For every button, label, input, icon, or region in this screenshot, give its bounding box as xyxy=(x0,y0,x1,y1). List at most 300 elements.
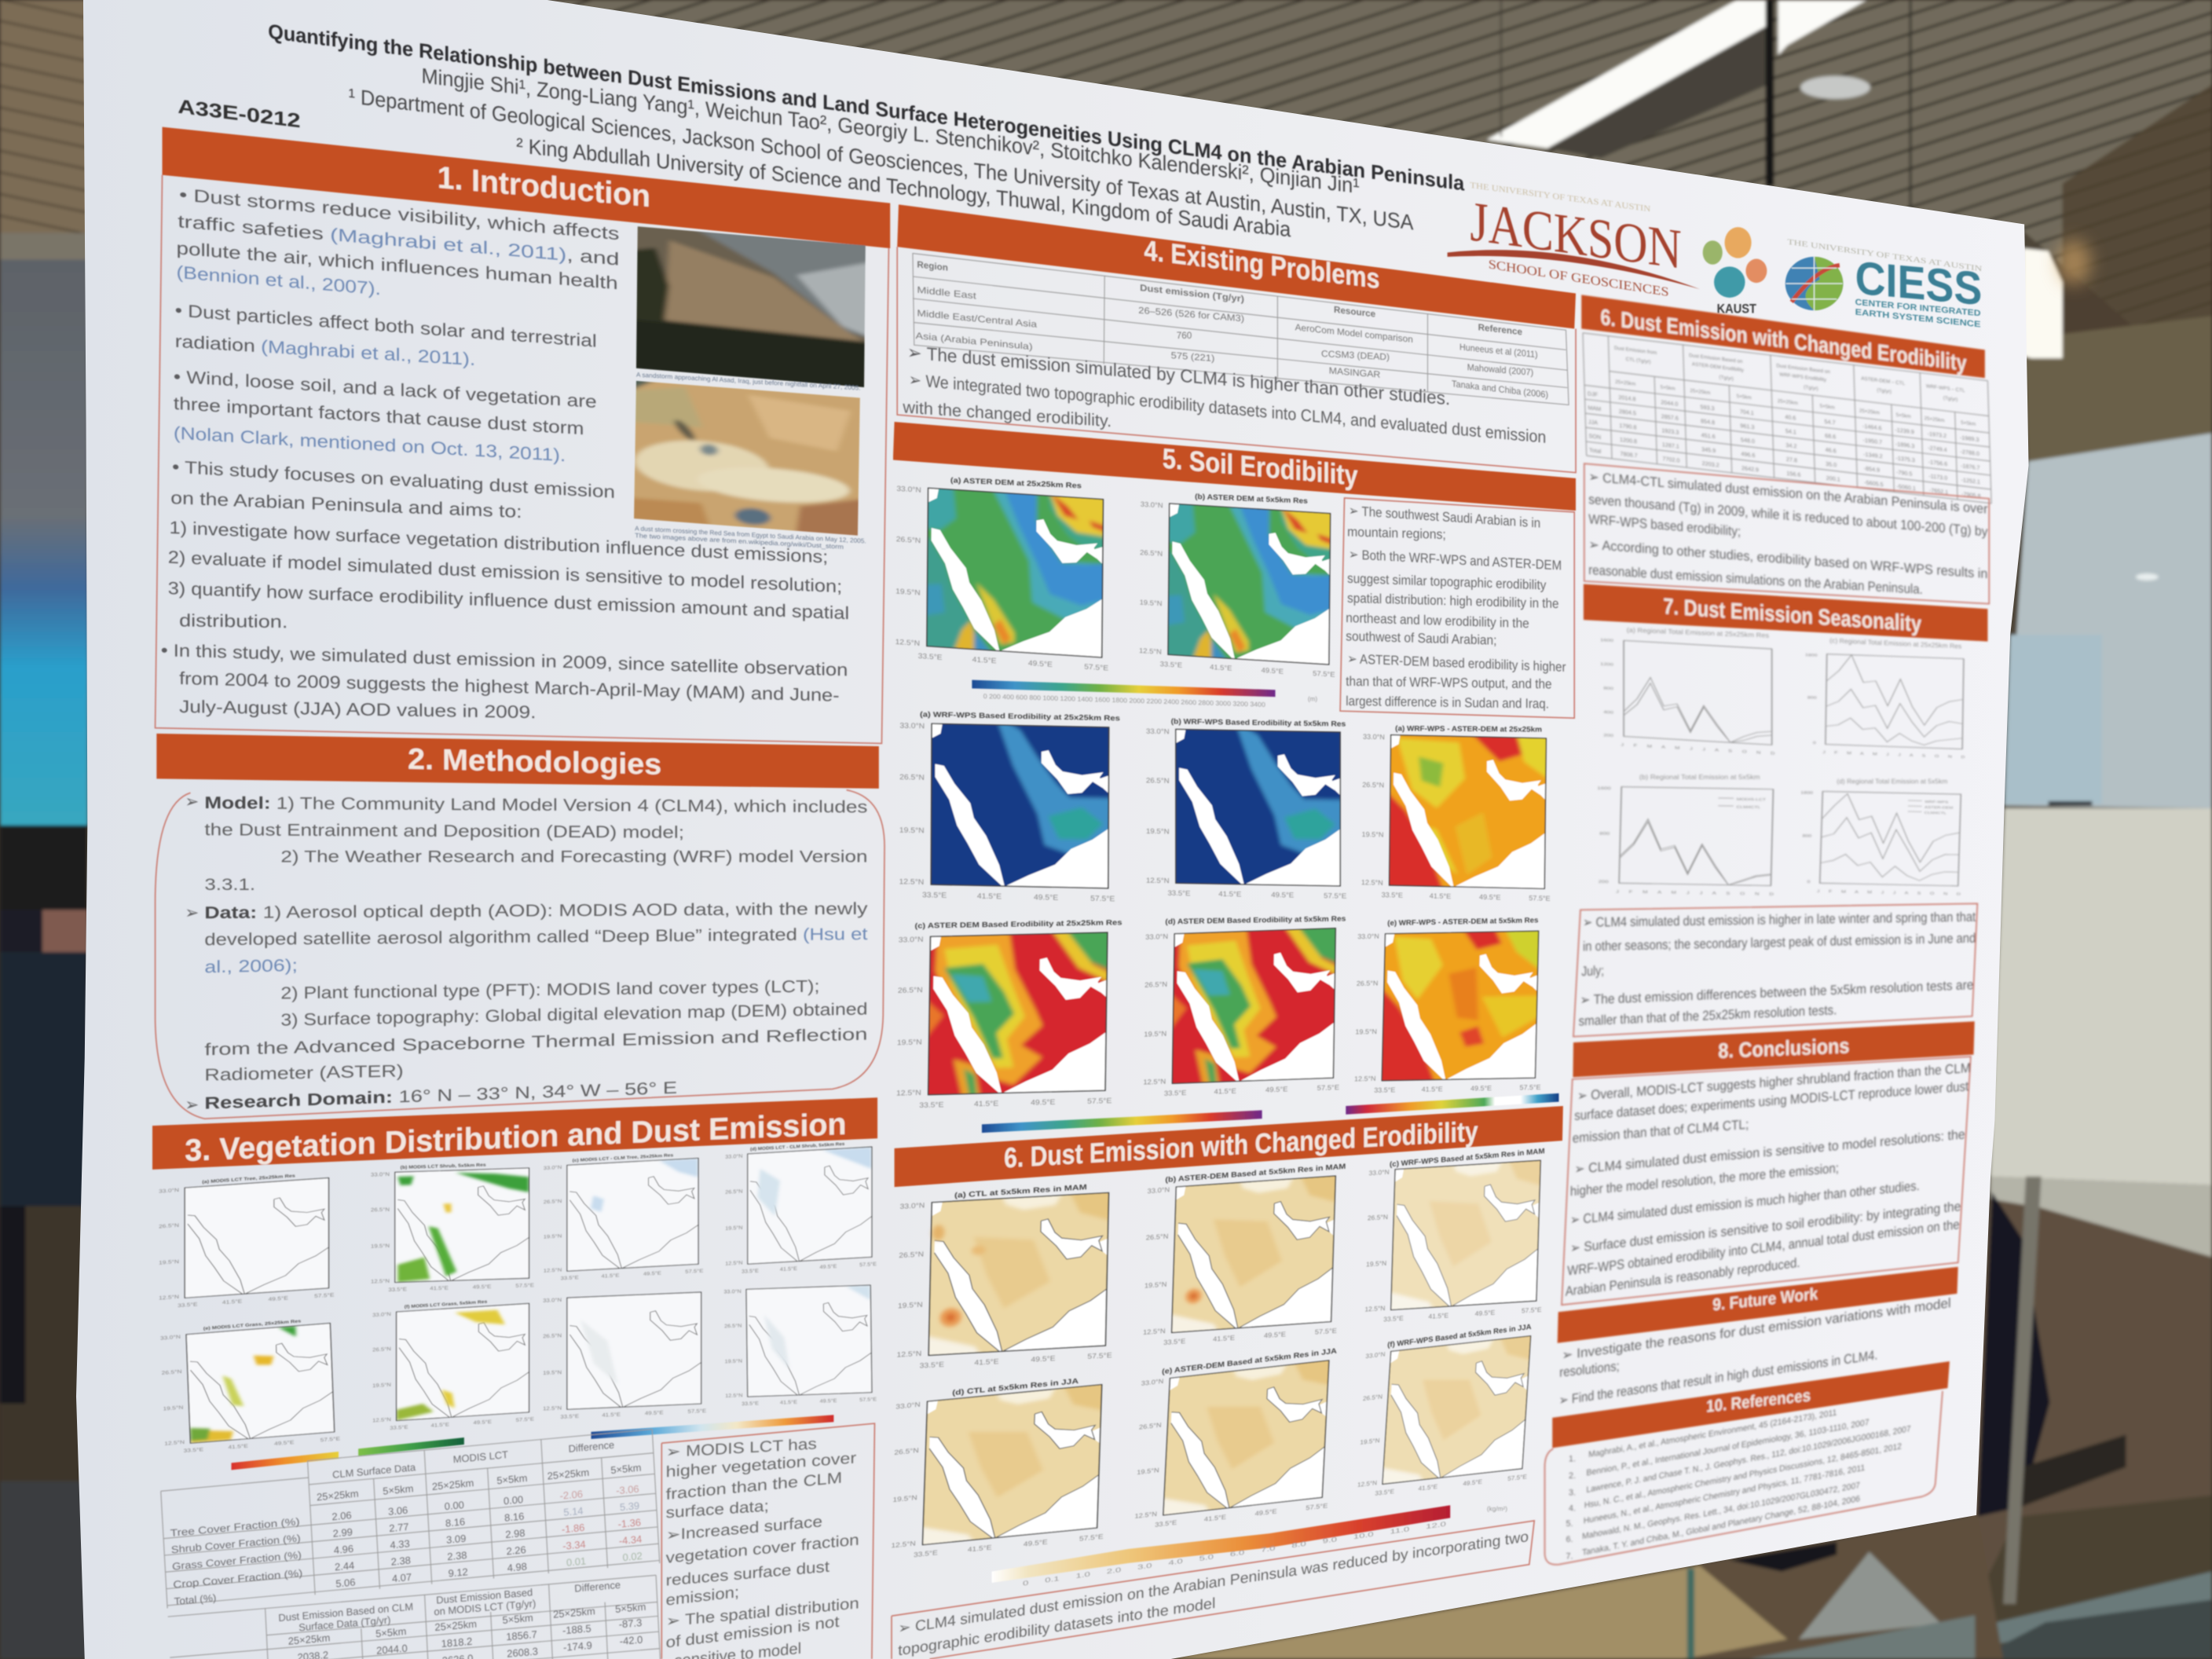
table: dust emission by vegetation: 2044.0 xyxy=(376,1643,408,1657)
table: published dust emission estimates: MASINGAR xyxy=(1329,366,1380,380)
map: WRF minus ASTER 5 km xyxy=(1354,916,1548,1094)
chart: regional emission b: 200 xyxy=(1599,880,1609,884)
introduction text: • Dust storms reduce visibility, which affects xyxy=(179,185,619,244)
panel: 3. Vegetation Distribution and Dust Emission xyxy=(152,1097,877,1659)
logo: Jackson School of Geosciences: JACKSON xyxy=(1470,190,1682,281)
table: vegetation cover fractions: 5×5km xyxy=(383,1482,414,1497)
table: vegetation cover fractions: -2.06 xyxy=(559,1488,583,1502)
table: published dust emission estimates: Middle East/Central Asia xyxy=(917,308,1038,330)
table: seasonal dust emission: Dust Emission Based on xyxy=(1689,353,1743,364)
introduction text: July-August (JJA) AOD values in 2009. xyxy=(179,697,536,722)
table: seasonal dust emission: 5×5km xyxy=(1661,385,1675,392)
chart: regional emission b: 1600 xyxy=(1597,786,1611,791)
table: seasonal dust emission: -790.5 xyxy=(1896,468,1913,478)
table: seasonal dust emission: 1287.1 xyxy=(1662,441,1679,450)
colorbar: erodibility xyxy=(982,1110,1262,1133)
chart: regional emission d: WRF-WPS xyxy=(1925,800,1949,804)
map: difference 1: (c) MODIS LCT - CLM Tree, 25x25km Res xyxy=(573,1154,674,1163)
table: vegetation cover fractions: 2.98 xyxy=(505,1527,526,1540)
map: WRF-WPS MAM: (c) WRF-WPS Based at 5x5km Res in MAM xyxy=(1390,1147,1545,1168)
vegetation findings text box: surface data; xyxy=(666,1498,769,1522)
table: vegetation cover fractions: 2.06 xyxy=(331,1509,352,1522)
table: vegetation cover fractions: Shrub Cover Fraction (%) xyxy=(171,1532,301,1555)
chart: regional emission a: J F M A M J J A S O N D xyxy=(1621,743,1775,756)
introduction text: traffic safeties (Maghrabi et al., 2011) , and xyxy=(178,211,619,269)
table: seasonal dust emission: 25×25km xyxy=(1924,416,1945,423)
introduction text: distribution. xyxy=(179,610,287,632)
conclusions text: higher the model resolution, the more the emission; xyxy=(1570,1160,1839,1199)
introduction text: • This study focuses on evaluating dust emission xyxy=(172,457,615,502)
title: Quantifying the Relationship between Dust Emissions and Land Surface Heterogeneities Using CLM4 on the Arabian Peninsula xyxy=(268,20,1465,196)
introduction text: three important factors that cause dust storm xyxy=(174,394,584,438)
table: seasonal dust emission: 200.1 xyxy=(1826,474,1840,483)
chart: regional emission a: 400 xyxy=(1603,710,1613,715)
map: WRF-WPS JJA xyxy=(1357,1323,1540,1499)
table: seasonal dust emission: 7808.7 xyxy=(1620,450,1638,459)
banner: 3. Vegetation: 3. Vegetation Distribution and Dust Emission xyxy=(185,1107,847,1168)
map: ASTER erodibility 5 km xyxy=(1143,914,1346,1098)
chart: regional emission a: 200 xyxy=(1603,733,1613,738)
table: seasonal dust emission: -1950.7 xyxy=(1863,437,1882,445)
soil erodibility text box: largest difference is in Sudan and Iraq. xyxy=(1346,694,1549,712)
table: dust emission by vegetation: -188.5 xyxy=(562,1622,591,1636)
table: seasonal dust emission: 2203.2 xyxy=(1702,460,1719,469)
logo: CIESS: THE UNIVERSITY OF TEXAS AT AUSTIN xyxy=(1787,238,1982,273)
table: seasonal dust emission: -1876.7 xyxy=(1961,462,1980,471)
table: seasonal dust emission: 2044.0 xyxy=(1661,398,1678,408)
table: published dust emission estimates: Huneeus et al (2011) xyxy=(1459,342,1538,360)
table: seasonal dust emission: JJA xyxy=(1588,418,1598,427)
map: ASTER erodibility 5 km: (d) ASTER DEM Based Erodibility at 5x5km Res xyxy=(1165,914,1346,925)
map: difference 2: (d) MODIS LCT - CLM Shrub, 5x5km Res xyxy=(750,1142,845,1152)
banner: 4. Existing Problems: 4. Existing Problems xyxy=(1144,234,1379,295)
table: vegetation cover fractions: 2.38 xyxy=(447,1549,467,1562)
table: seasonal dust emission: -1349.2 xyxy=(1863,451,1883,460)
table: dust emission by vegetation: -174.9 xyxy=(563,1639,592,1654)
table: seasonal dust emission: 5×5km xyxy=(1961,420,1976,427)
chart: regional emission a xyxy=(1600,627,1775,756)
banner: 2. Methodologies xyxy=(156,734,879,789)
table: seasonal dust emission: 1923.3 xyxy=(1661,427,1679,436)
reference list: Hsu, N. C., et al., Atmospheric Chemistry and Physics Discussions, 12, 8465-8501, 2012 xyxy=(1584,1441,1902,1511)
table: seasonal dust emission: -1756.6 xyxy=(1928,458,1947,467)
table: dust emission by vegetation: Dust Emission Based on CLM xyxy=(278,1601,413,1624)
colorbar: dust emission xyxy=(992,1505,1507,1588)
table: seasonal dust emission: -1239.9 xyxy=(1895,427,1914,435)
map: CTL MAM: (a) CTL at 5x5km Res in MAM xyxy=(954,1183,1087,1199)
map: difference 3 xyxy=(543,1291,706,1421)
table: seasonal dust emission: 451.6 xyxy=(1701,431,1716,440)
table: dust emission by vegetation: -87.3 xyxy=(618,1617,643,1630)
table: dust emission by vegetation: 25×25km xyxy=(553,1605,595,1621)
authors: Mingjie Shi¹, Zong-Liang Yang¹, Weichun Tao², Georgiy L. Stenchikov², Stoitchko Kalenderski², Qinjian Jin¹ xyxy=(421,64,1360,198)
map: difference 1 xyxy=(544,1152,704,1282)
introduction text: 3) quantify how surface erodibility influence dust emission amount and spatial xyxy=(168,578,849,623)
table: seasonal dust emission: 2857.6 xyxy=(1661,412,1679,422)
chart: regional emission b xyxy=(1595,774,1777,896)
table: vegetation cover fractions: CLM Surface Data xyxy=(332,1461,416,1481)
table: seasonal dust emission: -854.9 xyxy=(1864,465,1880,474)
table: seasonal dust emission: 5×5km xyxy=(1737,394,1752,401)
table: seasonal dust emission: ASTER-DEM – CTL xyxy=(1861,376,1906,386)
table: vegetation cover fractions: 5.06 xyxy=(335,1576,356,1590)
panel: 10. References xyxy=(1545,1361,1950,1565)
banner: 6. Dust Emission table xyxy=(1581,295,1985,378)
table: seasonal dust emission: 704.1 xyxy=(1740,408,1754,416)
table: seasonal dust emission: (Tg/yr) xyxy=(1943,395,1957,403)
reference list: 5. xyxy=(1566,1519,1573,1529)
table: seasonal dust emission: 40.6 xyxy=(1785,413,1796,422)
vegetation findings text box: ➢ MODIS LCT has xyxy=(666,1435,817,1461)
erodibility results text box: reasonable dust emission simulations on the Arabian Peninsula. xyxy=(1588,562,1923,597)
affiliation 2: ² King Abdullah University of Science and Technology, Thuwal, Kingdom of Saudi Arabia xyxy=(516,134,1291,242)
conclusions text: WRF-WPS obtained erodibility into CLM4, annual total dust emission on the xyxy=(1567,1217,1960,1278)
soil erodibility text box xyxy=(1340,498,1574,718)
table: seasonal dust emission: 1200.8 xyxy=(1620,436,1637,445)
chart: regional emission d: 1800 xyxy=(1800,791,1814,795)
table: vegetation cover fractions: 9.12 xyxy=(448,1566,468,1580)
table: dust emission by vegetation: 1818.2 xyxy=(441,1635,473,1650)
vegetation findings text box: ➢Increased surface xyxy=(666,1513,822,1544)
table: published dust emission estimates: AeroCom Model comparison xyxy=(1295,322,1413,345)
affiliation 1: ¹ Department of Geological Sciences, Jackson School of Geosciences, The University of Texas at Austin, Austin, TX, USA xyxy=(349,84,1414,234)
poster id: A33E-0212 xyxy=(178,96,301,132)
vegetation findings text box xyxy=(661,1423,874,1659)
table: dust emission by vegetation: Difference xyxy=(574,1579,621,1595)
colorbar: dust emission: 0 0.1 1.0 2.0 3.0 4.0 5.0 6.0 7.0 8.0 9.0 10.0 11.0 12.0 xyxy=(1023,1520,1446,1588)
map: ASTER DEM 5 km: (b) ASTER DEM at 5x5km Res xyxy=(1195,493,1308,505)
reference list: 4. xyxy=(1569,1503,1576,1513)
photo caption: A sandstorm approaching Al Asad, Iraq, just before nightfall on April 27, 2005. xyxy=(636,372,861,392)
table: published dust emission estimates: Asia (Arabia Peninsula) xyxy=(916,331,1033,352)
table: seasonal dust emission: -1989.3 xyxy=(1960,434,1979,443)
table: vegetation cover fractions: 0.02 xyxy=(622,1550,643,1563)
reference list: Lawrence, P. J. and Chase T. N., J. Geophys. Res., 112, doi:10.1029/2006JG000168, 2007 xyxy=(1587,1424,1911,1495)
chart: regional emission b: (b) Regional Total Emission at 5x5km xyxy=(1639,774,1760,781)
table: dust emission by vegetation: Surface Data (Tg/yr) xyxy=(298,1613,391,1633)
lamp glow xyxy=(2056,240,2091,285)
seasonality text box: smaller than that of the 25x25km resolution tests. xyxy=(1579,1002,1837,1029)
table: seasonal dust emission: (Tg/yr) xyxy=(1804,385,1818,392)
methodology text: Data: 1) Aerosol optical depth (AOD): MODIS AOD data, with the newly xyxy=(204,899,868,922)
colorbar: dust emission: (kg/m²) xyxy=(1487,1505,1507,1512)
erodibility results text box: WRF-WPS based erodibility; xyxy=(1588,511,1741,539)
table: seasonal dust emission: -5060.1 xyxy=(1896,482,1916,492)
table: vegetation cover fractions: 5×5km xyxy=(496,1472,528,1486)
table: seasonal dust emission: 25×25km xyxy=(1690,388,1711,396)
table: seasonal dust emission: 27.8 xyxy=(1786,456,1797,463)
banner: 5. Soil Erodibility: 5. Soil Erodibility xyxy=(1163,442,1358,492)
erodibility results text box: seven thousand (Tg) in 2009, while it is reduced to about 100-200 (Tg) by xyxy=(1588,492,1988,539)
logo: CIESS: CENTER FOR INTEGRATED xyxy=(1855,298,1981,318)
table: seasonal dust emission: -7652.1 xyxy=(1929,486,1948,496)
chart: regional emission d: J F M A M J J A S O N D xyxy=(1817,890,1961,896)
logo: CIESS: EARTH SYSTEM SCIENCE xyxy=(1855,308,1980,329)
seasonality text box: in other seasons; the secondary largest peak of dust emission is in June and xyxy=(1583,931,1976,954)
table: seasonal dust emission: 548.0 xyxy=(1741,436,1755,445)
existing problems text: ➢ The dust emission simulated by CLM4 is higher than other studies. xyxy=(907,342,1450,408)
table: vegetation cover fractions: Crop Cover Fraction (%) xyxy=(173,1567,303,1591)
table: dust emission by vegetation: 5×5km xyxy=(615,1601,646,1615)
map: difference 4 xyxy=(723,1284,877,1408)
photo: sandstorm wall xyxy=(635,225,866,388)
soil erodibility text box: ➢ Both the WRF-WPS and ASTER-DEM xyxy=(1349,547,1562,573)
map: grass fraction with yellow patches xyxy=(160,1317,340,1456)
soil erodibility text box: mountain regions; xyxy=(1347,524,1446,542)
map: WRF-WPS erodibility 5 km xyxy=(1146,717,1350,900)
poster header: title and authors xyxy=(178,20,1465,242)
table: published dust emission estimates: 26–526 (526 for CAM3) xyxy=(1138,306,1244,324)
table: seasonal dust emission: Dust Emission Based on xyxy=(1776,363,1830,375)
map: tree fraction CLM: (a) MODIS LCT Tree, 25x25km Res xyxy=(202,1174,295,1185)
map: ASTER-DEM JJA xyxy=(1134,1346,1339,1531)
table: vegetation cover fractions: Total (%) xyxy=(174,1591,217,1607)
map: grass fraction 5 km: (f) MODIS LCT Grass, 5x5km Res xyxy=(405,1299,488,1309)
map: grass fraction 5 km xyxy=(372,1296,534,1432)
table: seasonal dust emission: -5605.5 xyxy=(1864,478,1884,488)
panel: 6. Dust Emission with Changed Erodibility (table) xyxy=(1581,295,1991,604)
table: vegetation cover fractions: 25×25km xyxy=(317,1488,359,1503)
introduction text: • In this study, we simulated dust emission in 2009, since satellite observation xyxy=(161,640,848,679)
chart: regional emission d xyxy=(1797,778,1965,896)
reference list: 6. xyxy=(1566,1535,1573,1544)
table: seasonal dust emission: 1790.8 xyxy=(1619,422,1637,430)
table: seasonal dust emission: -1173.0 xyxy=(1928,472,1947,482)
chart: regional emission b: J F M A M J J A S O N D xyxy=(1616,890,1774,896)
table: vegetation cover fractions: 0.01 xyxy=(566,1555,586,1569)
table: vegetation cover fractions: 4.98 xyxy=(507,1560,527,1574)
chart: regional emission d: (d) Regional Total Emission at 5x5km xyxy=(1837,778,1948,786)
table: seasonal dust emission: 7702.0 xyxy=(1662,455,1680,464)
erodibility results text box xyxy=(1584,463,1989,604)
map: tree fraction MODIS with green patches: (b) MODIS LCT Shrub, 5x5km Res xyxy=(401,1163,486,1170)
reference list: 3. xyxy=(1569,1489,1576,1498)
table: seasonal dust emission: Dust Emission from xyxy=(1614,346,1657,356)
banner: 8. Conclusions xyxy=(1573,1021,1975,1077)
chart: regional emission d: 800 xyxy=(1802,834,1812,838)
table: published dust emission estimates: Reference xyxy=(1478,322,1522,337)
table: vegetation cover fractions: 0.00 xyxy=(504,1493,523,1507)
table: seasonal dust emission: 54.1 xyxy=(1785,427,1796,436)
future work text: ➢ Investigate the reasons for dust emission variations with model xyxy=(1562,1295,1951,1363)
panel: 2. Methodologies xyxy=(156,734,884,1119)
photo caption: A dust storm crossing the Red Sea from Egypt to Saudi Arabia on May 12, 2005. xyxy=(635,525,866,544)
table: seasonal dust emission: 2804.5 xyxy=(1619,408,1636,416)
chart: regional emission b: MODIS-LCT xyxy=(1737,798,1767,802)
methodology text: Radiometer (ASTER) xyxy=(204,1060,404,1085)
table: vegetation cover fractions: Grass Cover Fraction (%) xyxy=(172,1549,302,1573)
soil erodibility text box: suggest similar topographic erodibility xyxy=(1347,571,1547,593)
future work text xyxy=(1558,1295,1951,1408)
banner: 2. Methodologies: 2. Methodologies xyxy=(408,742,661,781)
table: published dust emission estimates: Tanaka and Chiba (2006) xyxy=(1452,379,1548,400)
existing problems text: with the changed erodibility. xyxy=(902,397,1111,430)
map: grass fraction with yellow patches: (e) MODIS LCT Grass, 25x25km Res xyxy=(203,1319,302,1331)
logo: CIESS: CIESS xyxy=(1855,251,1982,315)
table: seasonal dust emission: 68.6 xyxy=(1825,432,1836,440)
banner: 10. References: 10. References xyxy=(1706,1385,1811,1416)
conclusions text xyxy=(1566,1060,1971,1299)
reference list: 7. xyxy=(1566,1551,1573,1561)
introduction text: (Bennion et al., 2007). xyxy=(176,262,381,298)
map: WRF minus ASTER 5 km: (e) WRF-WPS - ASTER-DEM at 5x5km Res xyxy=(1387,916,1538,927)
banner: 9. Future Work: 9. Future Work xyxy=(1712,1284,1818,1314)
table: published dust emission estimates: 575 (221) xyxy=(1171,350,1214,364)
logo: CIESS xyxy=(1785,238,1982,329)
map: ASTER-DEM JJA: (e) ASTER-DEM Based at 5x5km Res in JJA xyxy=(1162,1346,1337,1375)
table: published dust emission estimates: Mahowald (2007) xyxy=(1467,362,1533,378)
table: seasonal dust emission: (Tg/yr) xyxy=(1877,387,1892,395)
table: seasonal dust emission: WRF-WPS – CTL xyxy=(1926,383,1965,394)
table: seasonal dust emission: -1973.2 xyxy=(1928,430,1946,439)
panel: 5. Soil Erodibility xyxy=(893,422,1576,1133)
map: WRF-WPS erodibility 25 km xyxy=(899,710,1120,903)
table: published dust emission estimates: Middle East xyxy=(917,285,977,302)
banner: 6. Dust Emission maps xyxy=(895,1106,1563,1187)
soil erodibility text box: southwest of Saudi Arabian; xyxy=(1346,628,1496,648)
table: vegetation cover fractions: -3.34 xyxy=(562,1538,586,1552)
conclusions text: ➢ CLM4 simulated dust emission is sensitive to model resolutions: the xyxy=(1574,1126,1965,1177)
banner: 8. Conclusions: 8. Conclusions xyxy=(1718,1034,1849,1063)
table: seasonal dust emission: MAM xyxy=(1588,404,1601,412)
reference list: 1. xyxy=(1569,1455,1576,1464)
table: dust emission by vegetation: 25×25km xyxy=(287,1632,331,1647)
introduction text xyxy=(161,185,849,722)
introduction text: pollute the air, which influences human health xyxy=(176,238,618,293)
conclusions text: Arabian Peninsula is reasonably reproduced. xyxy=(1566,1255,1800,1299)
chart: regional emission d: 0 xyxy=(1807,881,1811,884)
table: seasonal dust emission: (Tg/yr) xyxy=(1719,375,1734,382)
seasonality text box xyxy=(1573,903,1977,1037)
table: seasonal dust emission xyxy=(1583,333,1991,504)
banner: 6. Dust Emission table: 6. Dust Emission with Changed Erodibility xyxy=(1600,305,1967,376)
vegetation findings text box: reduces surface dust xyxy=(666,1558,830,1590)
table: vegetation cover fractions: 25×25km xyxy=(547,1467,590,1481)
map: ASTER-DEM MAM: (b) ASTER-DEM Based at 5x5km Res in MAM xyxy=(1165,1163,1346,1184)
table: vegetation cover fractions: 4.96 xyxy=(334,1543,353,1556)
seasonality text box: ➢ The dust emission differences between the 5x5km resolution tests are xyxy=(1580,977,1973,1008)
conclusions text: ➢ Overall, MODIS-LCT suggests higher shrubland fraction than the CLM xyxy=(1577,1060,1971,1104)
table: vegetation cover fractions: 0.00 xyxy=(444,1499,464,1512)
table: vegetation cover fractions: 8.16 xyxy=(445,1515,465,1529)
introduction text: (Nolan Clark, mentioned on Oct. 13, 2011). xyxy=(174,423,566,465)
map: ASTER erodibility 25 km xyxy=(896,918,1122,1111)
banner: 7. Dust Emission Seasonality xyxy=(1584,584,1987,642)
table: seasonal dust emission: 34.2 xyxy=(1785,441,1797,450)
table: vegetation cover fractions: 2.44 xyxy=(335,1559,355,1573)
chart: regional emission b: CLM4CTL xyxy=(1736,806,1760,810)
table: dust emission by vegetation: 5×5km xyxy=(375,1625,407,1639)
chart: regional emission c: 800 xyxy=(1807,696,1818,700)
banner: 1. Introduction: 1. Introduction xyxy=(438,160,650,214)
future work text: ➢ Find the reasons that result in high dust emissions in CLM4. xyxy=(1558,1346,1877,1408)
dust emission conclusion box: ➢ CLM4 simulated dust emission on the Arabian Peninsula was reduced by incorporating two xyxy=(898,1529,1529,1638)
map: CTL MAM xyxy=(896,1183,1119,1372)
methodology text: ➢ xyxy=(185,1094,199,1114)
dust emission conclusion box: topographic erodibility datasets into the model xyxy=(898,1595,1215,1659)
methodology text: 3.3.1. xyxy=(204,874,255,894)
table: seasonal dust emission: -2788.0 xyxy=(1960,448,1979,457)
methodology text: 3) Surface topography: Global digital elevation map (DEM) obtained xyxy=(280,998,867,1030)
table: seasonal dust emission: 496.6 xyxy=(1741,450,1756,459)
map: ASTER DEM 25 km: (a) ASTER DEM at 25x25km Res xyxy=(950,476,1082,489)
vegetation findings text box: fraction than the CLM xyxy=(666,1470,842,1503)
map: WRF-WPS erodibility 5 km: (b) WRF-WPS Based Erodibility at 5x5km Res xyxy=(1171,717,1346,728)
erodibility results text box: ➢ According to other studies, erodibility based on WRF-WPS results in xyxy=(1588,537,1987,581)
panel: 9. Future Work xyxy=(1558,1267,1958,1408)
logo: KAUST xyxy=(1703,227,1767,317)
introduction text: radiation (Maghrabi et al., 2011). xyxy=(175,331,475,369)
table: vegetation cover fractions: 5×5km xyxy=(610,1462,642,1476)
colorbar: difference xyxy=(591,1415,833,1439)
table: vegetation cover fractions: MODIS LCT xyxy=(452,1448,508,1465)
chart: regional emission a: 1600 xyxy=(1600,638,1613,643)
introduction text: • Wind, loose soil, and a lack of vegetation are xyxy=(174,367,597,412)
table: seasonal dust emission: 46.6 xyxy=(1826,446,1837,454)
table: seasonal dust emission: 854.8 xyxy=(1701,417,1715,426)
table: vegetation cover fractions: 4.07 xyxy=(392,1571,412,1584)
reference list: Mahowald, N. M., Geophys. Res. Lett., 34, doi:10.1029/2007GL030472, 2007 xyxy=(1582,1481,1860,1541)
soil erodibility text box: ➢ ASTER-DEM based erodibility is higher xyxy=(1347,651,1566,675)
colorbar: elevation xyxy=(972,680,1317,709)
table: seasonal dust emission: 25×25km xyxy=(1778,398,1798,406)
existing problems text: ➢ We integrated two topographic erodibility datasets into CLM4, and evaluated dust emission xyxy=(909,369,1546,447)
map: WRF minus ASTER 25 km: (a) WRF-WPS - ASTER-DEM at 25x25km xyxy=(1395,724,1542,734)
chart: regional emission a: 800 xyxy=(1603,687,1613,691)
existing problems text xyxy=(902,342,1546,447)
map: difference 2 xyxy=(725,1141,877,1276)
table: published dust emission estimates: Region xyxy=(917,259,948,273)
chart: regional emission c: J F M A M J J A S O N D xyxy=(1822,751,1965,760)
logo: Jackson School of Geosciences: SCHOOL OF GEOSCIENCES xyxy=(1489,257,1669,299)
banner: 9. Future Work xyxy=(1558,1267,1958,1343)
banner: 7. Dust Emission Seasonality: 7. Dust Emission Seasonality xyxy=(1663,594,1921,637)
soil erodibility text box: than that of WRF-WPS output, and the xyxy=(1346,674,1552,691)
reference list: Maghrabi, A., et al., Atmospheric Environment, 45 (2164-2173), 2011 xyxy=(1588,1408,1837,1459)
colorbar: erodibility difference xyxy=(1346,1093,1558,1115)
map: tree fraction CLM xyxy=(159,1171,334,1309)
right column of the poster xyxy=(1545,295,1991,1565)
table: vegetation cover fractions: 3.06 xyxy=(388,1504,408,1518)
vegetation findings text box: vegetation cover fraction xyxy=(666,1532,859,1567)
table: vegetation cover fractions: -3.06 xyxy=(616,1483,639,1496)
table: published dust emission estimates: Dust emission (Tg/yr) xyxy=(1140,283,1244,305)
table: seasonal dust emission: ASTER-DEM Erodibility xyxy=(1692,361,1745,373)
table: vegetation cover fractions xyxy=(160,1430,660,1608)
banner: 1. Introduction xyxy=(163,127,890,248)
reference list xyxy=(1566,1408,1911,1561)
colorbar: elevation: 0 200 400 600 800 1000 1200 1400 1600 1800 2000 2200 2400 2600 2800 3000 3200 3400 xyxy=(983,693,1265,709)
table: seasonal dust emission: WRF-WPS Erodibility xyxy=(1779,372,1827,383)
table: dust emission by vegetation xyxy=(168,1575,661,1659)
vegetation findings text box: higher vegetation cover xyxy=(666,1449,857,1481)
methodology text xyxy=(185,791,868,1114)
table: dust emission by vegetation: 1856.7 xyxy=(506,1628,537,1643)
map: WRF minus ASTER 25 km xyxy=(1361,724,1555,903)
chart: regional emission c: (c) Regional Total Emission at 25x25km Res xyxy=(1829,637,1961,650)
table: dust emission by vegetation: Dust Emission Based xyxy=(436,1586,533,1606)
table: vegetation cover fractions: 2.26 xyxy=(506,1544,526,1557)
table: seasonal dust emission: CTL (Tg/yr) xyxy=(1626,357,1651,365)
methodology text: 2) Plant functional type (PFT): MODIS land cover types (LCT); xyxy=(280,976,819,1003)
introduction text: on the Arabian Peninsula and aims to: xyxy=(170,488,522,522)
reference list: 2. xyxy=(1569,1471,1576,1481)
table: seasonal dust emission: 54.7 xyxy=(1824,418,1836,427)
map: WRF-WPS erodibility 25 km: (a) WRF-WPS Based Erodibility at 25x25km Res xyxy=(920,710,1120,722)
table: seasonal dust emission: 156.6 xyxy=(1786,470,1801,478)
chart: regional emission a: (a) Regional Total Emission at 25x25km Res xyxy=(1627,627,1769,639)
conclusions text: emission than that of CLM4 CTL; xyxy=(1573,1117,1749,1146)
